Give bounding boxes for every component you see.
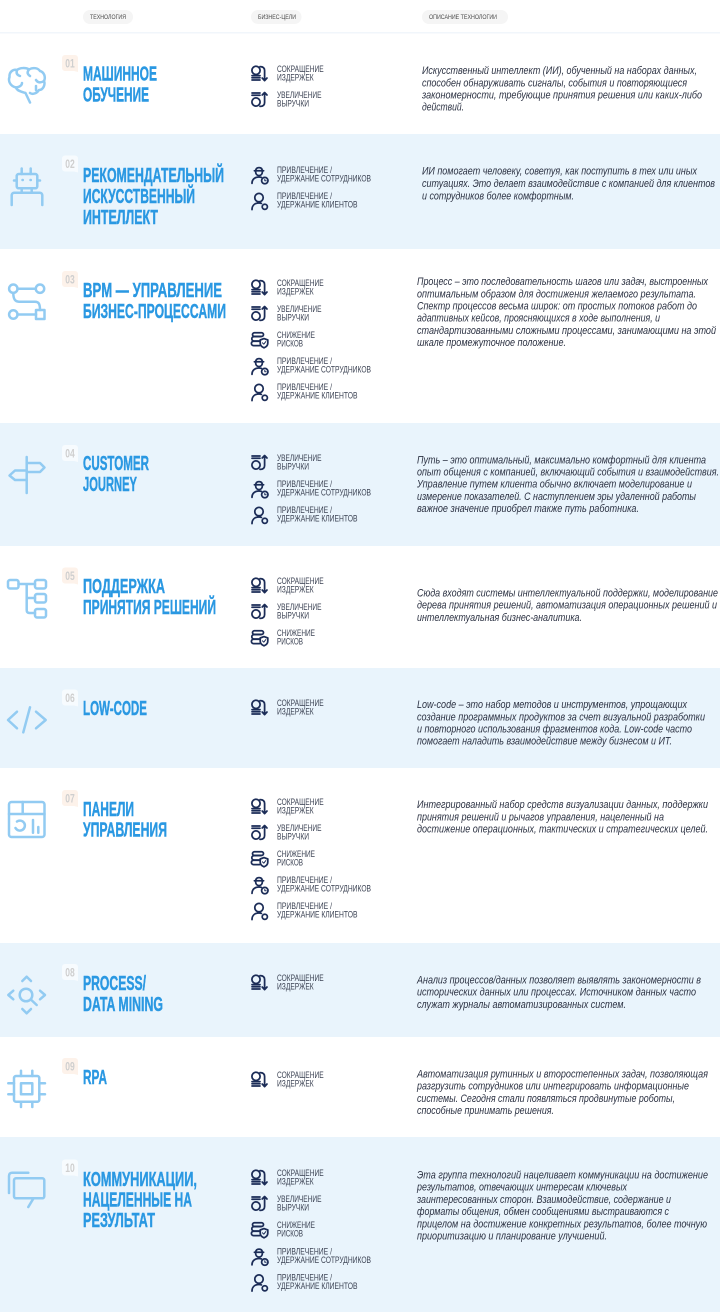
goal: risk reduction [251,1220,315,1238]
goal: staff: УДЕРЖАНИЕ СОТРУДНИКОВ [277,1255,371,1265]
goal: staff: УДЕРЖАНИЕ СОТРУДНИКОВ [277,884,371,894]
goal: cost reduction: ИЗДЕРЖЕК [277,806,314,816]
title: НАЦЕЛЕННЫЕ НА [83,1190,192,1212]
header pill: technology [83,10,133,24]
description: важное значение приобрел также путь работника. [417,503,639,515]
goal: staff: ПРИВЛЕЧЕНИЕ / [277,875,332,885]
goal: revenue growth [252,90,322,108]
title: PROCESS/ [83,973,146,995]
description: служат журналы автоматизированных систем. [417,999,626,1011]
description [421,65,702,114]
goal: staff: УДЕРЖАНИЕ СОТРУДНИКОВ [277,364,371,374]
goal: cost reduction [252,278,324,296]
panel: row 08 process data mining [0,943,720,1037]
description: шкале промежуточное положение. [417,337,566,349]
goal: cost reduction: ИЗДЕРЖЕК [277,286,314,296]
goal: revenue growth: УВЕЛИЧЕНИЕ [277,304,322,314]
goal: clients [252,191,358,210]
goal: clients: ПРИВЛЕЧЕНИЕ / [277,505,332,515]
goal: cost reduction [252,1168,324,1186]
goal: revenue growth: ВЫРУЧКИ [277,312,309,322]
title: ПОДДЕРЖКА [83,576,165,598]
title: JOURNEY [83,474,137,496]
title [83,973,163,1016]
table header [0,10,720,34]
panel: row 02 recommendation AI [0,134,720,249]
goal: risk reduction: РИСКОВ [277,338,303,348]
header pill: technology: ТЕХНОЛОГИЯ [90,14,126,21]
badge 10 [62,1160,78,1176]
panel: row 07 dashboards [9,790,708,920]
goal: staff: УДЕРЖАНИЕ СОТРУДНИКОВ [277,174,371,184]
title [83,280,226,323]
title: DATA MINING [83,994,163,1016]
description [416,975,701,1011]
description [417,699,705,748]
description: и сотрудников более комфортным. [422,190,574,202]
goal: cost reduction: СОКРАЩЕНИЕ [277,1070,324,1080]
goal: risk reduction [251,628,315,646]
goal: revenue growth: УВЕЛИЧЕНИЕ [277,1194,322,1204]
title: CUSTOMER [83,453,149,475]
goal: cost reduction [252,1070,324,1088]
goal: cost reduction: СОКРАЩЕНИЕ [277,278,324,288]
goal: cost reduction: СОКРАЩЕНИЕ [277,797,324,807]
goal: cost reduction: ИЗДЕРЖЕК [277,72,314,82]
title: БИЗНЕС-ПРОЦЕССАМИ [83,301,226,323]
icon: brain [9,68,45,102]
badge 01 [62,55,78,72]
description: способные принимать решения. [417,1105,554,1117]
goal: staff [252,356,371,375]
panel: row 10 communications [0,1137,720,1312]
goal: revenue growth [252,602,322,620]
title: ИНТЕЛЛЕКТ [83,207,158,229]
icon: magnifier with arrows [8,977,45,1013]
goal: revenue growth: УВЕЛИЧЕНИЕ [277,602,322,612]
title: ПРИНЯТИЯ РЕШЕНИЙ [83,595,216,619]
badge 09: 09 [65,1062,75,1074]
title [83,64,157,106]
icon: signpost [10,457,44,493]
goal: clients: ПРИВЛЕЧЕНИЕ / [277,901,332,911]
goal: staff [252,875,371,894]
description [417,799,708,835]
badge 04 [62,445,78,462]
panel: row 04 customer journey [0,423,720,546]
goal: cost reduction: ИЗДЕРЖЕК [277,982,314,992]
badge 02 [62,156,78,172]
goal: staff [252,479,371,498]
badge 02: 02 [65,159,75,171]
goal: revenue growth: УВЕЛИЧЕНИЕ [277,90,322,100]
goal: revenue growth: ВЫРУЧКИ [277,98,309,108]
header pill: business goals: БИЗНЕС-ЦЕЛИ [258,14,296,21]
icon: chip [8,1071,45,1107]
goal: revenue growth [252,453,322,472]
goal: revenue growth [252,304,322,322]
goal: revenue growth: УВЕЛИЧЕНИЕ [277,823,322,833]
badge 05 [62,568,78,584]
goal: clients: УДЕРЖАНИЕ КЛИЕНТОВ [277,200,358,210]
description: действий. [422,102,464,114]
goal: clients: УДЕРЖАНИЕ КЛИЕНТОВ [277,1281,358,1291]
goal: revenue growth: УВЕЛИЧЕНИЕ [277,453,322,463]
goal: revenue growth: ВЫРУЧКИ [277,832,309,842]
goal: risk reduction: РИСКОВ [277,1228,303,1238]
title: BPM — УПРАВЛЕНИЕ [83,280,222,302]
title [83,163,224,229]
goal: risk reduction [251,330,315,348]
panel: row 09 RPA [8,1058,708,1117]
icon: code brackets [8,707,46,732]
description: адаптивных кейсов, проясняющихся в ходе выполнения, и [417,313,660,325]
badge 09 [62,1058,78,1075]
goal: risk reduction: РИСКОВ [277,858,303,868]
title [83,453,149,496]
title: КОММУНИКАЦИИ, [83,1169,197,1191]
icon: robot [12,168,42,205]
goal: risk reduction: СНИЖЕНИЕ [277,330,315,340]
badge 07 [62,790,78,807]
goal: cost reduction: ИЗДЕРЖЕК [277,1176,314,1186]
goal: cost reduction: СОКРАЩЕНИЕ [277,973,324,983]
header pill: business goals [251,10,302,24]
goal: cost reduction: ИЗДЕРЖЕК [277,706,314,716]
icon: process path [9,284,45,319]
header pill: description [422,10,508,24]
title: РЕЗУЛЬТАТ [83,1210,155,1232]
goal: cost reduction: СОКРАЩЕНИЕ [277,1168,324,1178]
goal: staff: ПРИВЛЕЧЕНИЕ / [277,356,332,366]
goal: cost reduction [252,797,324,816]
goal: risk reduction: СНИЖЕНИЕ [277,849,315,859]
goal: revenue growth [252,823,322,842]
badge 07: 07 [65,794,75,806]
goal: clients [252,1272,358,1291]
panel: row 01 machine learning [9,55,702,114]
goal: staff [252,165,371,184]
badge 06 [62,690,78,706]
panel: row 03 BPM [9,271,716,401]
goal: cost reduction: СОКРАЩЕНИЕ [277,64,324,74]
title: УПРАВЛЕНИЯ [83,820,167,842]
title: ОБУЧЕНИЕ [83,84,149,106]
icon: chat bubbles [9,1173,44,1207]
badge 06: 06 [65,693,75,705]
title [83,576,216,619]
goal: risk reduction: СНИЖЕНИЕ [277,1220,315,1230]
badge 08: 08 [65,968,75,980]
badge 03 [62,271,78,288]
goal: cost reduction [252,973,324,992]
title [83,799,167,842]
goal: clients: ПРИВЛЕЧЕНИЕ / [277,382,332,392]
goal: cost reduction: СОКРАЩЕНИЕ [277,576,324,586]
goal: clients: ПРИВЛЕЧЕНИЕ / [277,191,332,201]
goal: revenue growth [252,1194,322,1212]
description [416,1170,708,1243]
goal: clients [252,901,358,920]
goal: clients: ПРИВЛЕЧЕНИЕ / [277,1272,332,1282]
icon: decision tree [8,580,46,618]
description: заинтересованных сторон. Взаимодействие, содержание и [416,1194,671,1206]
badge 08 [62,964,78,981]
goal: risk reduction: РИСКОВ [277,636,303,646]
goal: staff: ПРИВЛЕЧЕНИЕ / [277,479,332,489]
panel: row 05 decision support [8,568,718,646]
description: форматы общения, обмен сообщениями выстраиваются с [417,1206,669,1218]
title: ИСКУССТВЕННЫЙ [83,184,195,208]
goal: cost reduction [252,698,324,716]
badge 10: 10 [65,1163,75,1175]
goal: cost reduction [252,64,324,82]
title: ПАНЕЛИ [83,799,134,821]
badge 04: 04 [65,448,75,460]
goal: clients [252,382,358,401]
title [83,1169,197,1232]
title: RPA [83,1067,107,1089]
description [416,1068,708,1117]
goal: cost reduction: ИЗДЕРЖЕК [277,584,314,594]
goal: cost reduction: СОКРАЩЕНИЕ [277,698,324,708]
description [416,454,719,515]
goal: risk reduction [251,849,315,868]
goal: revenue growth: ВЫРУЧКИ [277,610,309,620]
badge 05: 05 [65,571,75,583]
goal: risk reduction: СНИЖЕНИЕ [277,628,315,638]
description: результатов, отвечающих интересам ключевых [416,1182,627,1194]
description [417,276,716,349]
title: РЕКОМЕНДАТЕЛЬНЫЙ [83,163,224,187]
icon: dashboard [9,802,44,837]
panel: row 06 low-code [0,668,720,768]
description: помогает наладить взаимодействие между бизнесом и ИТ. [417,736,672,748]
goal: revenue growth: ВЫРУЧКИ [277,1202,309,1212]
goal: staff: ПРИВЛЕЧЕНИЕ / [277,165,332,175]
goal: staff: ПРИВЛЕЧЕНИЕ / [277,1246,332,1256]
description: принятия решений и рычагов управления, нацеленный на [417,811,664,823]
description [417,588,718,624]
goal: clients [252,505,358,524]
goal: staff [252,1246,371,1265]
goal: revenue growth: ВЫРУЧКИ [277,462,309,472]
badge 01: 01 [65,58,75,70]
goal: clients: УДЕРЖАНИЕ КЛИЕНТОВ [277,390,358,400]
description: приоритизацию и планирование улучшений. [417,1231,607,1243]
goal: staff: УДЕРЖАНИЕ СОТРУДНИКОВ [277,488,371,498]
goal: clients: УДЕРЖАНИЕ КЛИЕНТОВ [277,910,358,920]
title: МАШИННОЕ [83,64,157,86]
goal: cost reduction [252,576,324,594]
description: интеллектуальная бизнес-аналитика. [417,612,582,624]
title: LOW-CODE [83,698,147,720]
header pill: description: ОПИСАНИЕ ТЕХНОЛОГИИ [429,14,497,21]
goal: clients: УДЕРЖАНИЕ КЛИЕНТОВ [277,514,358,524]
description [422,166,715,202]
badge 03: 03 [65,274,75,286]
goal: cost reduction: ИЗДЕРЖЕК [277,1078,314,1088]
